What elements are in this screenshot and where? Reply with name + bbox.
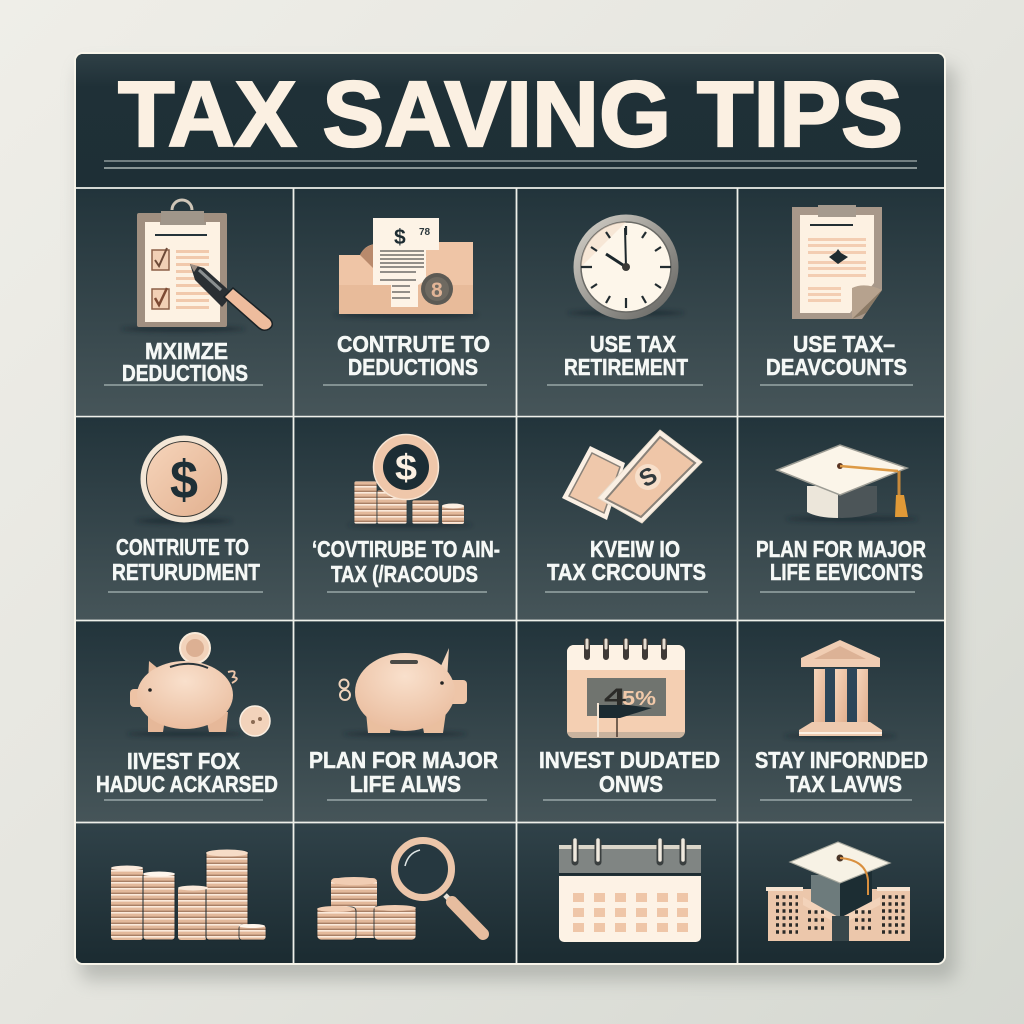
label: plan for major life events: LIFE EEVICONTS (770, 559, 923, 585)
label: contribute to tax accounts: ‘COVTIRUBE TO AIN- (312, 536, 500, 562)
icon: coin on coin stacks (348, 434, 472, 528)
panel: maximize deductions (104, 200, 272, 386)
label: plan for major life events: PLAN FOR MAJOR (756, 536, 926, 562)
label: plan for major life laws (309, 747, 498, 797)
panel: invest dated news (539, 640, 720, 800)
label: contribute to tax accounts (312, 536, 500, 587)
label: review tax accounts: TAX CRCOUNTS (547, 559, 706, 585)
icon: banknotes (562, 430, 702, 523)
label: contribute to retirement (112, 534, 260, 585)
label: use tax retirement: USE TAX (590, 331, 677, 357)
icon: desk calendar with percent (567, 640, 685, 738)
panel: plan for major life events (756, 445, 926, 592)
label: maximize deductions: DEDUCTIONS (122, 360, 248, 386)
label: review tax accounts (547, 536, 706, 585)
label: invest for education: HADUC ACKARSED (96, 771, 278, 797)
label: stay informed tax laws: STAY INFORNDED (755, 747, 928, 773)
main panel (74, 52, 946, 965)
panel: contribute to retirement (108, 436, 263, 592)
label: plan for major life laws: PLAN FOR MAJOR (309, 747, 498, 773)
panel: coin stacks (111, 850, 266, 940)
icon: document with folded corner (792, 205, 882, 319)
icon: dollar coin: $ (170, 450, 198, 510)
label: contribute to tax accounts: TAX (/RACOUDS (331, 561, 478, 587)
icon: piggy bank (340, 648, 467, 736)
icon: folder with receipt and coin: 78 (419, 227, 431, 238)
panel: use tax-advantaged accounts (760, 205, 913, 385)
label: stay informed tax laws (755, 747, 928, 797)
icon: coins with magnifying glass (317, 840, 483, 940)
title: TAX SAVING TIPS (118, 62, 903, 166)
icon: banknotes: S (635, 462, 662, 493)
icon: calendar (559, 840, 701, 942)
panel: graduation cap on building (766, 842, 910, 941)
label: invest for education: IIVEST FOX (127, 748, 241, 774)
icon: desk calendar with percent: 5% (622, 688, 656, 710)
icon: graduation cap (777, 445, 918, 522)
panel: use tax retirement (547, 214, 703, 385)
label: contribute to retirement: RETURUDMENT (112, 559, 260, 585)
label: contribute to deductions (337, 331, 490, 380)
panel: wall calendar (559, 840, 701, 942)
panel: review tax accounts (545, 430, 708, 592)
icon: coin stacks (111, 850, 266, 940)
label: use tax retirement (564, 331, 688, 380)
panel: contribute to deductions (323, 218, 490, 385)
label: use tax-deavcounts: DEAVCOUNTS (766, 354, 907, 380)
icon: clipboard and pen (121, 200, 272, 332)
label: contribute to deductions: CONTRUTE TO (337, 331, 490, 357)
label: maximize deductions (122, 338, 248, 386)
label: maximize deductions: MXIMZE (145, 338, 228, 364)
icon: temple (784, 640, 896, 738)
icon: folder with receipt and coin (334, 218, 478, 318)
label: use tax retirement: RETIREMENT (564, 354, 688, 380)
label: review tax accounts: KVEIW IO (590, 536, 680, 562)
label: contribute to deductions: DEDUCTIONS (348, 354, 478, 380)
panel: invest for education (96, 633, 278, 800)
panel: coins and magnifier (317, 840, 483, 940)
label: invest dated news: ONWS (599, 771, 663, 797)
icon: piggy bank with coins (127, 633, 270, 736)
label: contribute to retirement: CONTRIUTE TO (116, 534, 249, 560)
icon: folder with receipt and coin: 8 (431, 279, 443, 302)
label: use tax-deavcounts (766, 331, 907, 380)
label: stay informed tax laws: TAX LAVWS (786, 771, 902, 797)
label: invest for education (96, 748, 278, 797)
icon: dollar coin (136, 436, 232, 524)
icon: desk calendar with percent: 4 (604, 684, 627, 711)
icon: folder with receipt and coin: $ (394, 226, 406, 249)
icon: university building with cap (766, 842, 910, 941)
label: use tax-deavcounts: USE TAX– (793, 331, 895, 357)
panel: contribute to tax accounts (312, 434, 500, 592)
label: invest dated news: INVEST DUDATED (539, 747, 720, 773)
label: invest dated news (539, 747, 720, 797)
panel: plan for major life laws (309, 648, 498, 800)
icon: clock (568, 214, 684, 320)
icon: coin on coin stacks: $ (395, 447, 417, 488)
label: plan for major life events (756, 536, 926, 585)
panel: stay informed tax laws (755, 640, 928, 800)
label: plan for major life laws: LIFE ALWS (350, 771, 461, 797)
header panel (76, 54, 944, 187)
